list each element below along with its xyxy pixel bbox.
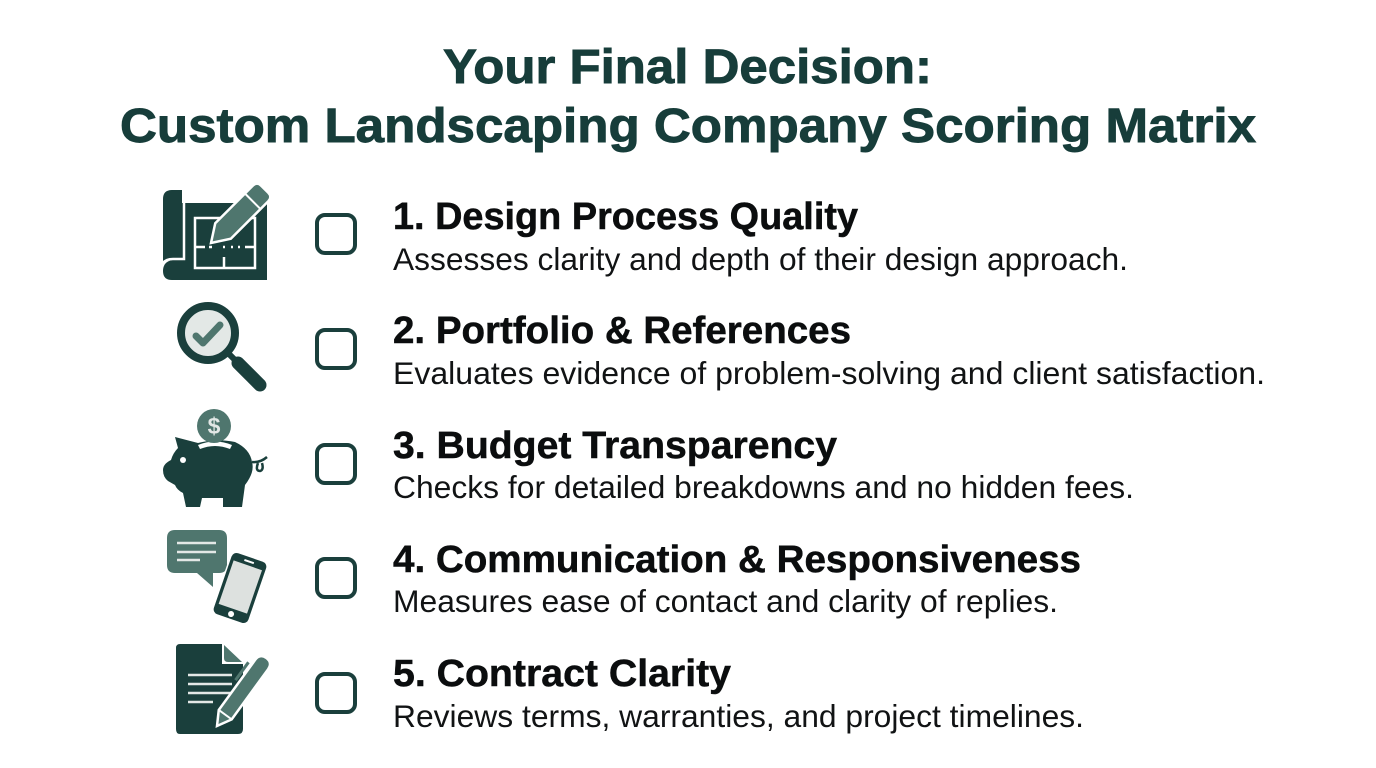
icon: document with pen	[176, 644, 273, 734]
checkbox 5	[317, 674, 355, 712]
icon: blueprint with pencil	[163, 181, 273, 280]
title: Your Final Decision:	[443, 41, 932, 94]
criterion 1: 1. Design Process Quality	[393, 196, 858, 238]
criterion 1	[393, 196, 1128, 277]
title: Custom Landscaping Company Scoring Matrix	[120, 100, 1256, 153]
criterion 2	[393, 310, 1265, 391]
checkbox 4	[317, 559, 355, 597]
criterion 2: Evaluates evidence of problem-solving and client satisfaction.	[393, 355, 1265, 391]
criterion 5: Reviews terms, warranties, and project timelines.	[393, 698, 1084, 734]
title	[120, 41, 1256, 153]
criterion 1: Assesses clarity and depth of their design approach.	[393, 241, 1128, 277]
icon: magnifying glass with check	[181, 306, 260, 385]
icon: chat bubble and phone	[167, 530, 269, 625]
checkbox 2	[317, 330, 355, 368]
criterion 5	[393, 653, 1084, 734]
criterion 3: Checks for detailed breakdowns and no hidden fees.	[393, 469, 1134, 505]
criterion 3: 3. Budget Transparency	[393, 425, 837, 467]
criterion 4	[393, 539, 1081, 619]
checkbox 1	[317, 215, 355, 253]
icon: piggy bank with coin: $	[208, 413, 221, 439]
criterion 5: 5. Contract Clarity	[393, 653, 731, 695]
criterion 2: 2. Portfolio & References	[393, 310, 851, 352]
icon: piggy bank with coin	[163, 409, 267, 507]
checkbox 3	[317, 445, 355, 483]
criterion 3	[393, 425, 1134, 505]
criterion 4: Measures ease of contact and clarity of replies.	[393, 583, 1058, 619]
criterion 4: 4. Communication & Responsiveness	[393, 539, 1081, 581]
